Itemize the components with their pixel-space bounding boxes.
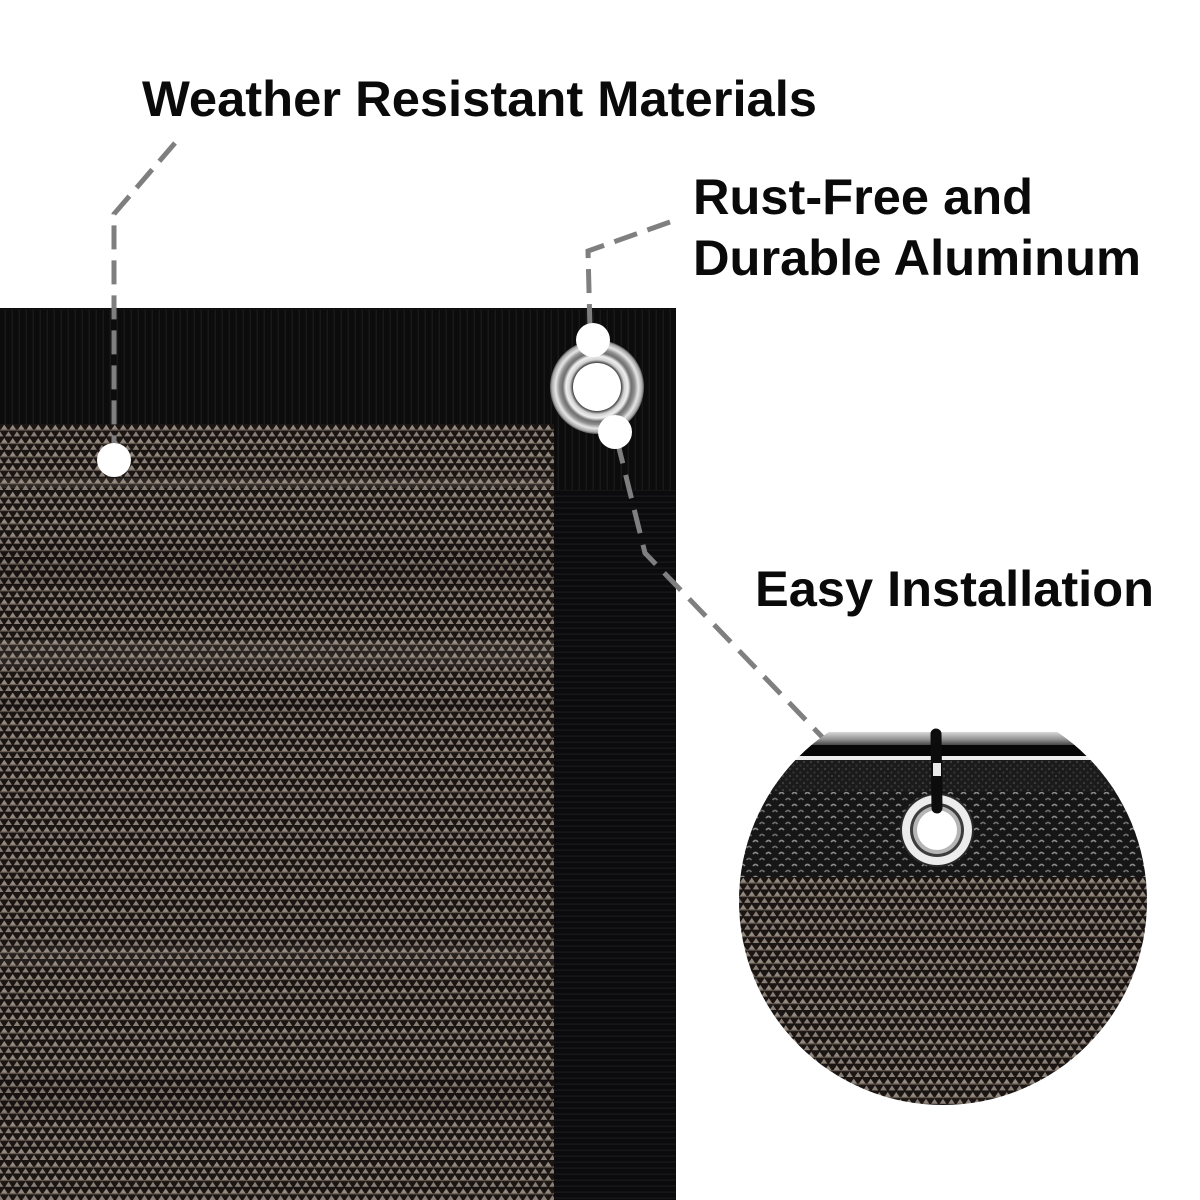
arrow: rust-free leader line: [588, 222, 670, 330]
black fabric border: [0, 308, 676, 1200]
arrow: easy installation leader line: [617, 440, 826, 741]
icon: aluminum grommet: [550, 340, 644, 434]
heading: rust-free and durable aluminum: [693, 169, 1141, 286]
heading: easy installation: Easy Installation: [755, 561, 1154, 617]
arrow: weather resistant leader line: [114, 143, 175, 445]
icon: detail grommet with zip tie: [900, 734, 974, 867]
marker dot: mesh: [97, 443, 131, 477]
marker dot: grommet top: [576, 323, 610, 357]
panel: installation detail circle: [735, 732, 1155, 1112]
detail rail: [796, 732, 1090, 760]
heading: rust-free and durable aluminum: Durable Aluminum: [693, 230, 1141, 286]
heading: weather resistant materials: Weather Resistant Materials: [142, 71, 817, 127]
heading: rust-free and durable aluminum: Rust-Free and: [693, 169, 1033, 225]
panel: shade fabric: [0, 308, 676, 1200]
mesh body: [0, 424, 554, 1200]
top border ribs: [0, 310, 676, 490]
detail mesh: [735, 877, 1155, 1112]
detail black border: [735, 760, 1155, 877]
marker dot: grommet bottom: [598, 415, 632, 449]
